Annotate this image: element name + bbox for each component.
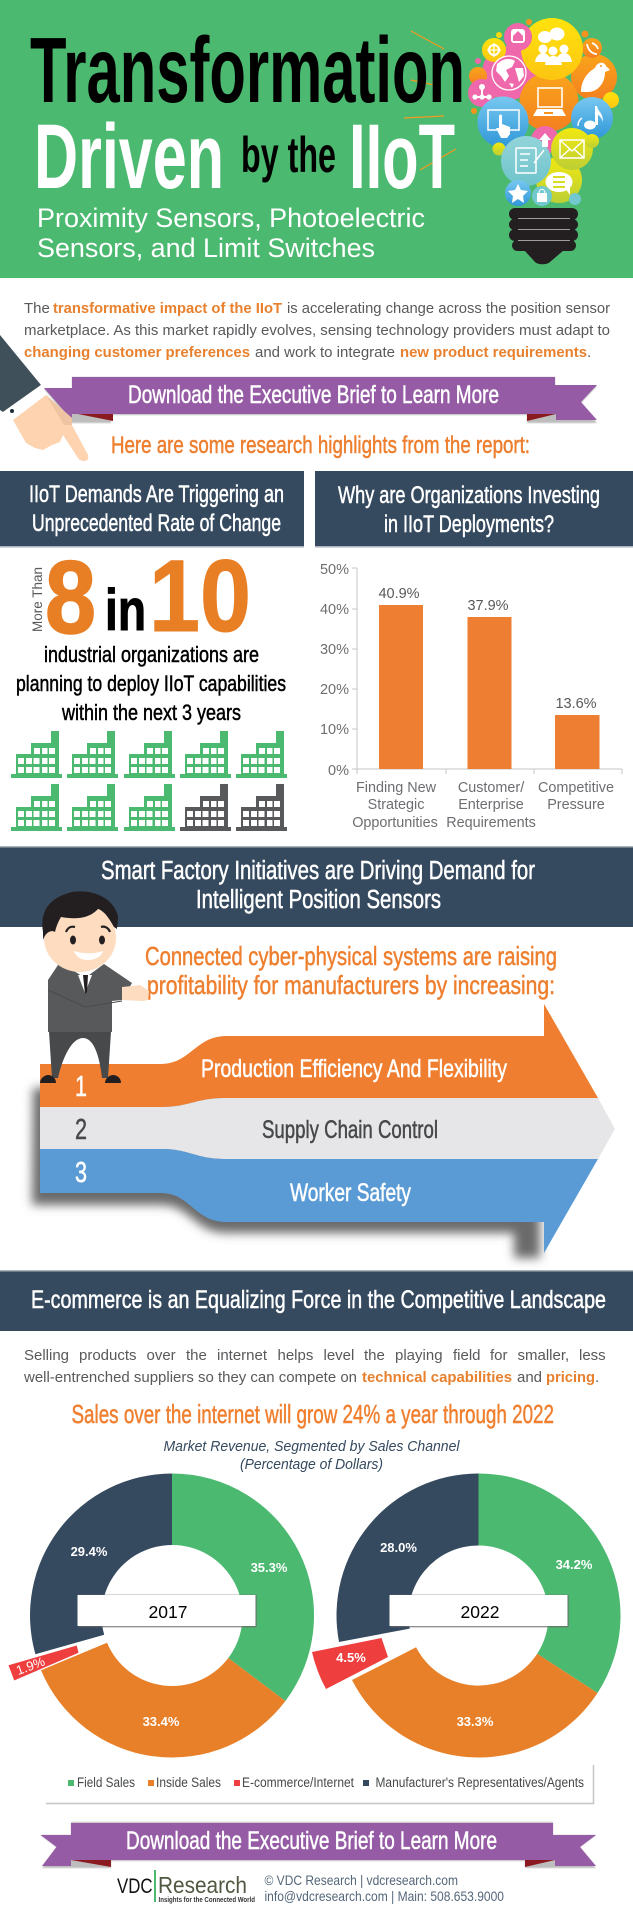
- chart axes: [352, 568, 622, 774]
- title: Driven: Driven: [34, 106, 224, 208]
- legend: Inside Sales: [156, 1775, 221, 1790]
- smile: [74, 951, 103, 960]
- chart title: Market Revenue, Segmented by Sales Channel: [164, 1438, 460, 1455]
- callout: cyber-physical systems: [145, 941, 557, 1000]
- logo: VDC Research: [117, 1870, 255, 1904]
- hand: [122, 985, 149, 1001]
- icon: gear: [487, 43, 501, 57]
- chart title: [164, 1438, 460, 1473]
- text block: introduction: changing customer preferences: [24, 344, 250, 361]
- jacket: [48, 962, 132, 1032]
- text block: e-commerce intro: playing: [395, 1347, 443, 1364]
- axis labels: 20%: [320, 682, 349, 698]
- text block: e-commerce intro: and: [517, 1369, 542, 1386]
- face: [44, 904, 116, 972]
- stat: 8 in 10: 10: [149, 539, 251, 653]
- donut chart: 2017: [8, 1473, 314, 1758]
- text block: introduction: The: [24, 300, 50, 317]
- arrow band 3: [40, 1149, 598, 1253]
- text block: e-commerce intro: helps: [278, 1347, 313, 1364]
- panel: smart factory heading: Intelligent Position Sensors: [196, 886, 441, 914]
- icon: speech bubble: [546, 172, 572, 195]
- arrow band 2: Supply Chain Control: [262, 1116, 438, 1144]
- category labels: Finding New: [356, 780, 437, 796]
- text block: e-commerce intro: [23, 1347, 606, 1386]
- icon: home pin: [511, 29, 525, 43]
- illustration: businessman: [40, 891, 149, 1083]
- banner: download bottom: [40, 1822, 596, 1868]
- axis labels: 30%: [320, 642, 349, 658]
- stat: 8 in 10: [29, 539, 251, 656]
- donut chart: 2017: 29.4%: [71, 1544, 108, 1559]
- category labels: Competitive: [538, 780, 614, 796]
- value labels: 13.6%: [555, 696, 597, 712]
- text block: e-commerce intro: field: [453, 1347, 481, 1364]
- text block: stat description: planning to deploy IIoT capabilities: [16, 671, 286, 696]
- panel: e-commerce heading: [0, 1270, 633, 1331]
- arrow band 1: 1: [75, 1071, 87, 1103]
- panel: smart factory heading: Smart Factory Initiatives are Driving Demand for: [101, 857, 535, 885]
- text block: e-commerce intro: well-entrenched suppliers so they can compete on: [23, 1369, 357, 1386]
- pictogram: factories 8 of 10: [11, 731, 287, 831]
- category labels: Customer/: [458, 780, 524, 796]
- category labels: Pressure: [547, 797, 605, 813]
- donut chart: 2017: 1.9%: [14, 1654, 47, 1678]
- value labels: 40.9%: [378, 586, 420, 602]
- logo: VDC Research: Insights for the Connected World: [158, 1897, 255, 1904]
- collar and tie: [78, 975, 92, 994]
- icon: people: [535, 28, 572, 65]
- arrow band 2: 2: [75, 1114, 87, 1146]
- panel: header: [0, 0, 633, 278]
- legend: E-commerce/Internet: [242, 1775, 354, 1790]
- text block: contact: © VDC Research | vdcresearch.com: [264, 1872, 458, 1888]
- banner: download bottom: Download the Executive Brief to Learn More: [126, 1827, 497, 1855]
- text block: contact: [264, 1872, 504, 1904]
- category labels: Strategic: [368, 797, 424, 813]
- value labels: 37.9%: [467, 598, 509, 614]
- category labels: Enterprise: [458, 797, 524, 813]
- donut chart: 2022: 34.2%: [556, 1557, 593, 1572]
- text block: introduction: transformative impact of the IIoT: [53, 300, 282, 317]
- axis labels: 10%: [320, 722, 349, 738]
- bars: [379, 605, 600, 769]
- text block: introduction: [24, 300, 610, 361]
- text block: e-commerce intro: the: [364, 1347, 385, 1364]
- shoes: [40, 1075, 121, 1083]
- axis labels: [320, 562, 349, 779]
- panel: right heading: in IIoT Deployments?: [384, 511, 554, 538]
- text block: contact: info@vdcresearch.com | Main: 508.653.9000: [264, 1888, 504, 1904]
- panel: smart factory heading: [0, 846, 633, 927]
- category labels: Opportunities: [352, 815, 438, 831]
- legend: Manufacturer's Representatives/Agents: [376, 1775, 584, 1790]
- text block: e-commerce intro: products: [79, 1347, 137, 1364]
- category labels: [352, 780, 614, 831]
- icon: globe: [492, 56, 526, 90]
- donut chart: 2017: 35.3%: [251, 1560, 288, 1575]
- year label 2017: 2017: [149, 1602, 187, 1622]
- text block: introduction: is accelerating change across the position sensor: [287, 300, 610, 317]
- text block: stat description: industrial organizations are: [44, 642, 259, 667]
- subtitle: Proximity Sensors, Photoelectric: [37, 203, 425, 233]
- text block: e-commerce intro: less: [579, 1347, 606, 1364]
- text block: e-commerce intro: smaller,: [518, 1347, 569, 1364]
- icon: shopping bag: [537, 189, 547, 202]
- legend: Field Sales: [77, 1775, 135, 1790]
- axis labels: 50%: [320, 562, 349, 578]
- icon: star: [508, 184, 528, 203]
- subtitle: [37, 203, 425, 263]
- donut chart: 2022: [312, 1474, 621, 1758]
- arrow band 1: [40, 1004, 598, 1107]
- icon: bird: [581, 63, 610, 92]
- text block: e-commerce intro: level: [324, 1347, 354, 1364]
- donut chart: 2022: 28.0%: [380, 1540, 417, 1555]
- icon: pointing hand: [0, 335, 88, 461]
- text block: introduction: new product requirements: [400, 344, 587, 361]
- text block: e-commerce intro: .: [595, 1369, 599, 1386]
- panel: left heading: Unprecedented Rate of Change: [32, 510, 281, 537]
- chart title: (Percentage of Dollars): [240, 1456, 383, 1473]
- icon: light bulb of app bubbles: [468, 18, 619, 264]
- title: IIoT: IIoT: [349, 106, 455, 208]
- text block: stat description: within the next 3 years: [61, 700, 241, 725]
- subheading: research highlights: Here are some research highlights from the report:: [111, 432, 530, 459]
- icon: envelope: [560, 140, 584, 158]
- year label 2022: [390, 1595, 568, 1627]
- icon: phone: [587, 43, 598, 54]
- arrow band 2: [40, 1098, 615, 1159]
- arrow band 3: 3: [75, 1157, 87, 1189]
- text block: introduction: marketplace. As this market rapidly evolves, sensing technology providers must adapt to: [24, 322, 610, 339]
- donut chart: 2022: 33.3%: [457, 1714, 494, 1729]
- arrow diagram: three benefits: [32, 1004, 615, 1258]
- logo: VDC Research: Research: [158, 1872, 247, 1898]
- donut chart: 2017: 33.4%: [143, 1714, 180, 1729]
- trousers: [49, 1032, 111, 1078]
- stat: 8 in 10: More Than: [29, 567, 45, 632]
- year label 2022: 2022: [461, 1602, 499, 1622]
- icon: bulb base: [509, 208, 578, 264]
- arrow band 3: Worker Safety: [290, 1179, 411, 1207]
- year label 2017: [78, 1595, 256, 1627]
- banner: download top: [44, 377, 597, 423]
- legend: [46, 1765, 594, 1804]
- icon: notepad: [516, 148, 544, 173]
- title: by the: by the: [241, 127, 336, 183]
- donut chart: 2022: 4.5%: [336, 1650, 366, 1665]
- icon: upload arrow: [539, 133, 551, 147]
- text block: e-commerce intro: over: [146, 1347, 176, 1364]
- arrow band 1: Production Efficiency And Flexibility: [201, 1055, 507, 1083]
- text block: introduction: and work to integrate: [255, 344, 395, 361]
- sparks: [404, 31, 456, 170]
- eyes and brows: [66, 927, 110, 944]
- text block: e-commerce intro: pricing: [546, 1369, 595, 1386]
- text block: e-commerce intro: Selling: [24, 1347, 69, 1364]
- panel: right heading: [315, 471, 633, 548]
- icon: music note: [578, 106, 603, 130]
- logo: VDC Research: VDC: [117, 1875, 152, 1898]
- text block: e-commerce intro: internet: [217, 1347, 268, 1364]
- panel: left heading: [0, 471, 304, 548]
- text block: introduction: .: [587, 344, 591, 361]
- bar chart: reasons for IIoT investment: [320, 562, 622, 831]
- text block: e-commerce intro: the: [186, 1347, 207, 1364]
- value labels: [378, 586, 597, 712]
- hair: [42, 891, 118, 940]
- subtitle: Sensors, and Limit Switches: [37, 233, 375, 263]
- text block: stat description: [16, 642, 286, 725]
- text block: e-commerce intro: technical capabilities: [362, 1369, 512, 1386]
- icon: network: [472, 84, 492, 100]
- stat: 8 in 10: 8: [45, 540, 96, 656]
- axis labels: 0%: [328, 763, 349, 779]
- panel: left heading: IIoT Demands Are Triggering an: [29, 481, 284, 508]
- banner: download top: Download the Executive Brief to Learn More: [128, 381, 499, 409]
- axis labels: 40%: [320, 602, 349, 618]
- stat: 8 in 10: in: [105, 578, 146, 643]
- icon: touch tablet: [488, 110, 519, 138]
- text block: e-commerce intro: for: [490, 1347, 508, 1364]
- icon: laptop: [533, 88, 566, 116]
- category labels: Requirements: [446, 815, 536, 831]
